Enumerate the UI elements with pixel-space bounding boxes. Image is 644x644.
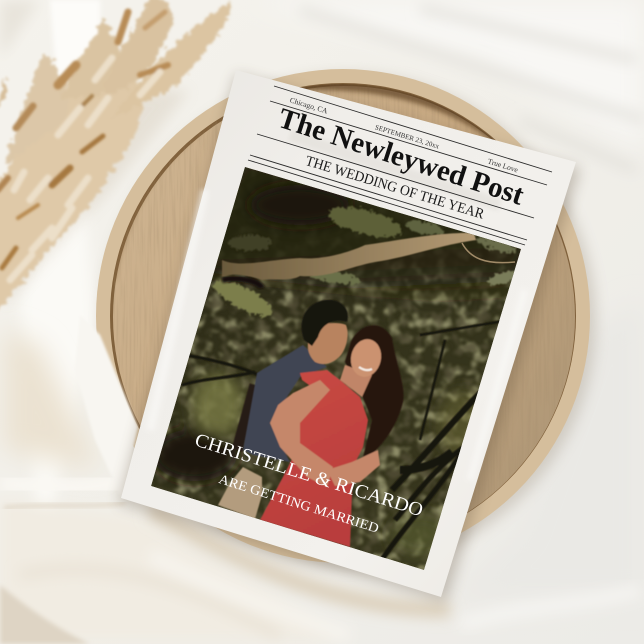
- dark flecks: [0, 12, 168, 268]
- upper foliage: [209, 201, 520, 323]
- photo of the couple: [140, 160, 530, 580]
- plume upper: [100, 0, 173, 95]
- paper folds: [150, 135, 525, 480]
- plume right: [110, 0, 232, 120]
- plume shadow: [4, 90, 190, 305]
- woman: shoulder and neck: [340, 365, 372, 397]
- branch shadow: [222, 279, 262, 288]
- masthead: location: Chicago, CA: [289, 95, 329, 116]
- main plume: [0, 73, 143, 318]
- newspaper title: The Newleywed Post: [274, 102, 528, 212]
- man: shirt: [243, 345, 327, 462]
- pampas grass: [0, 0, 232, 318]
- fabric fold over plate: [75, 315, 138, 498]
- small plume at edge: [0, 78, 7, 115]
- newspaper: [118, 70, 580, 602]
- woman: arm: [270, 380, 333, 487]
- tree branches: [181, 320, 500, 558]
- forest mottling: [140, 160, 530, 580]
- thin light twig: [462, 243, 515, 263]
- woman: dress: [260, 370, 368, 547]
- woman: smile: [359, 367, 372, 370]
- hands: [327, 450, 380, 486]
- large branch: [222, 233, 476, 280]
- masthead rules: [248, 86, 552, 245]
- light flecks: [10, 58, 160, 280]
- woman: hair: [345, 325, 404, 462]
- names: CHRISTELLE & RICARDO: [192, 430, 425, 521]
- paper sheet: [121, 70, 576, 597]
- sub caption: ARE GETTING MARRIED: [217, 471, 381, 536]
- woman: face: [350, 338, 382, 376]
- forest glow: [153, 185, 493, 557]
- man: pants: [218, 467, 262, 519]
- wood grain: [114, 94, 456, 396]
- man: hair: [302, 300, 348, 346]
- paper shadow: [118, 74, 580, 602]
- headline: THE WEDDING OF THE YEAR: [303, 153, 486, 223]
- plume middle: [60, 18, 126, 100]
- man: neck and face: [308, 323, 348, 364]
- wooden plate: [96, 69, 596, 568]
- masthead: date: SEPTEMBER 23, 20xx: [374, 123, 441, 151]
- side plume left: [5, 52, 67, 165]
- masthead: tagline: True Love: [487, 157, 520, 175]
- couple: [218, 300, 404, 547]
